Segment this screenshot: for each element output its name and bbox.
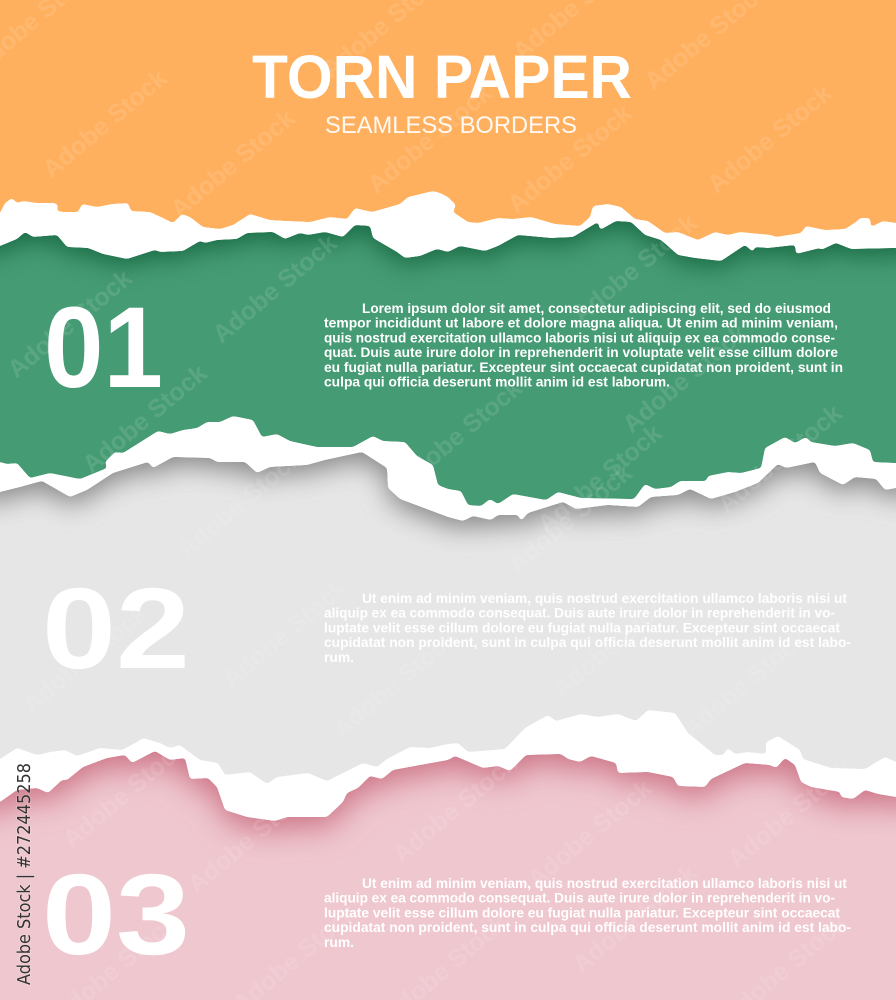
text block 02: aliquip ex ea commodo consequat. Duis aute irure dolor in reprehenderit in vo- xyxy=(324,606,835,621)
text block 01: Lorem ipsum dolor sit amet, consectetur adipiscing elit, sed do eiusmod xyxy=(362,301,831,316)
watermarks: Adobe Stock: Adobe Stock xyxy=(207,229,342,349)
number 03: 03 xyxy=(42,851,190,979)
watermarks: Adobe Stock: Adobe Stock xyxy=(392,374,527,494)
watermarks: Adobe Stock: Adobe Stock xyxy=(502,459,637,579)
text block 01: eu fugiat nulla pariatur. Excepteur sint occaecat cupidatat non proident, sunt in xyxy=(324,360,843,375)
panel: orange header background xyxy=(0,0,896,240)
watermarks: Adobe Stock: Adobe Stock xyxy=(702,79,837,199)
text block 03: aliquip ex ea commodo consequat. Duis aute irure dolor in reprehenderit in vo- xyxy=(324,891,835,906)
text block 02: Ut enim ad minim veniam, quis nostrud exercitation ullamco laboris nisi ut xyxy=(362,591,848,606)
torn white edge: orange over green xyxy=(0,0,896,261)
stock id label: Adobe Stock | #272445258 xyxy=(15,763,35,985)
torn white edge: green over grey xyxy=(0,400,896,521)
watermarks: Adobe Stock: Adobe Stock xyxy=(327,624,462,744)
watermarks: Adobe Stock: Adobe Stock xyxy=(617,319,752,439)
watermarks: Adobe Stock: Adobe Stock xyxy=(677,624,812,744)
text block 01: quis nostrud exercitation ullamco laboris nisi ut aliquip ex ea commodo conse- xyxy=(324,330,835,345)
watermarks: Adobe Stock: Adobe Stock xyxy=(172,444,307,564)
watermarks: Adobe Stock: Adobe Stock xyxy=(217,574,352,694)
watermarks: Adobe Stock: Adobe Stock xyxy=(712,399,847,519)
watermarks: Adobe Stock: Adobe Stock xyxy=(567,209,702,329)
text block 01 xyxy=(324,301,843,390)
watermarks: Adobe Stock: Adobe Stock xyxy=(547,584,682,704)
watermarks: Adobe Stock: Adobe Stock xyxy=(182,779,317,899)
watermarks: Adobe Stock: Adobe Stock xyxy=(165,104,300,224)
text block 02 xyxy=(324,591,851,665)
watermarks: Adobe Stock: Adobe Stock xyxy=(77,359,212,479)
subtitle: SEAMLESS BORDERS xyxy=(325,112,577,139)
text block 01: culpa qui officia deserunt mollit anim id est laborum. xyxy=(324,374,670,390)
watermarks: Adobe Stock: Adobe Stock xyxy=(37,64,172,184)
text block 02: luptate velit esse cillum dolore eu fugiat nulla pariatur. Excepteur sint occaecat xyxy=(324,620,841,635)
number 02: 02 xyxy=(42,565,190,693)
watermarks: Adobe Stock: Adobe Stock xyxy=(17,599,152,719)
panel: green section background xyxy=(0,190,896,506)
text block 02: cupidatat non proident, sunt in culpa qui officia deserunt mollit anim id est labo- xyxy=(324,635,851,650)
text block 01: tempor incididunt ut labore et dolore magna aliqua. Ut enim ad minim veniam, xyxy=(324,316,838,331)
title: TORN PAPER xyxy=(252,43,632,111)
torn white edge: grey over pink xyxy=(0,700,896,821)
watermarks: Adobe Stock: Adobe Stock xyxy=(57,734,192,854)
text block 03: Ut enim ad minim veniam, quis nostrud exercitation ullamco laboris nisi ut xyxy=(362,876,848,891)
text block 03: rum. xyxy=(324,935,354,950)
text block 03: cupidatat non proident, sunt in culpa qui officia deserunt mollit anim id est labo- xyxy=(324,920,851,935)
watermarks: Adobe Stock: Adobe Stock xyxy=(567,859,702,979)
watermarks: Adobe Stock: Adobe Stock xyxy=(522,774,657,894)
number 01: 01 xyxy=(44,284,163,412)
watermarks: Adobe Stock: Adobe Stock xyxy=(722,754,857,874)
text block 01: quat. Duis aute irure dolor in reprehenderit in voluptate velit esse cillum dolore xyxy=(324,345,838,360)
panel: grey section background xyxy=(0,440,896,784)
text block 02: rum. xyxy=(324,650,354,665)
watermarks: Adobe Stock: Adobe Stock xyxy=(2,264,137,384)
text block 03: luptate velit esse cillum dolore eu fugiat nulla pariatur. Excepteur sint occaecat xyxy=(324,905,841,920)
text block 03 xyxy=(324,876,851,950)
watermarks: Adobe Stock: Adobe Stock xyxy=(362,79,497,199)
watermarks: Adobe Stock: Adobe Stock xyxy=(387,749,522,869)
watermarks: Adobe Stock: Adobe Stock xyxy=(502,99,637,219)
watermarks: Adobe Stock: Adobe Stock xyxy=(532,419,667,539)
